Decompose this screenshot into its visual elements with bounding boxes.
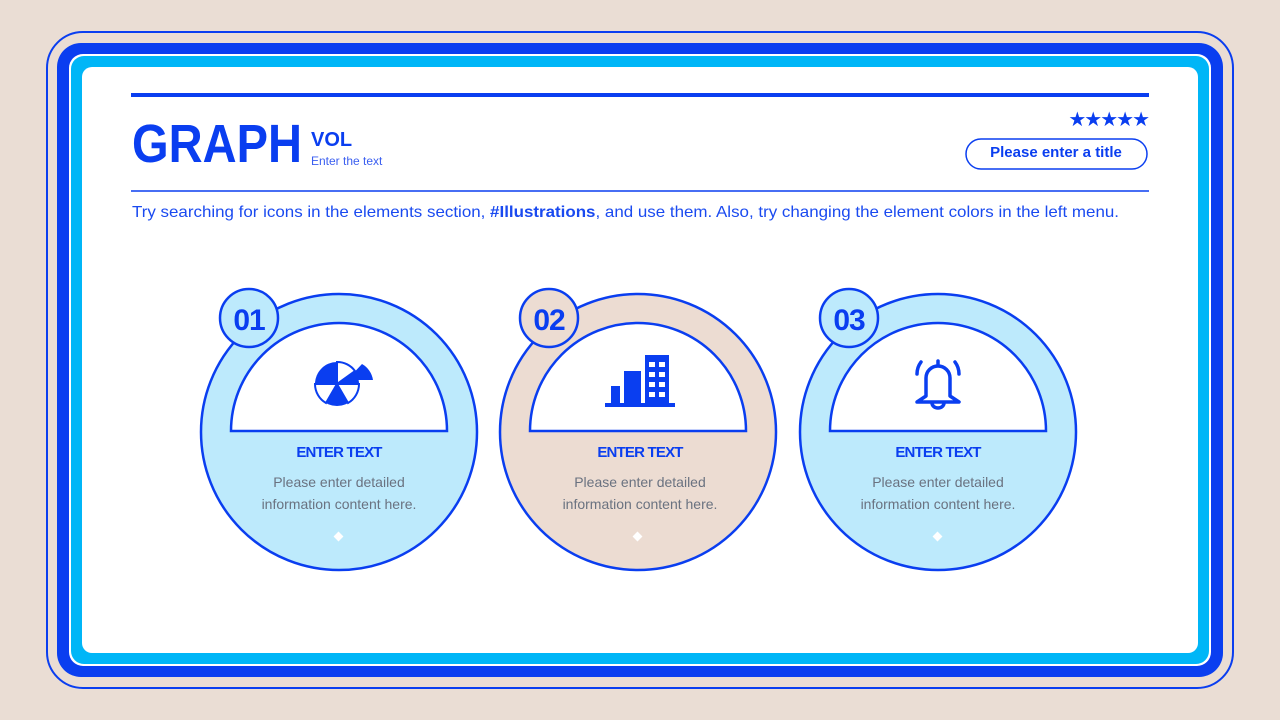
badge 02: 02 bbox=[533, 304, 565, 337]
badge 01: 01 bbox=[233, 304, 265, 337]
title: GRAPH bbox=[132, 114, 302, 174]
icon: pie chart bbox=[315, 362, 373, 406]
badge 02 bbox=[520, 289, 578, 347]
panel 2: Please enter detailed bbox=[574, 474, 706, 490]
title pill bbox=[966, 139, 1147, 169]
badge 03: 03 bbox=[833, 304, 865, 337]
panel 1: information content here. bbox=[262, 496, 416, 512]
subtitle VOL: VOL bbox=[311, 129, 352, 151]
panel 1 bbox=[201, 289, 477, 570]
panel 3: ENTER TEXT bbox=[895, 444, 981, 461]
icon: building bbox=[605, 355, 675, 407]
panel 1: ENTER TEXT bbox=[296, 444, 382, 461]
panel 2 bbox=[500, 289, 776, 570]
panel 2: ENTER TEXT bbox=[597, 444, 683, 461]
title pill: Please enter a title bbox=[990, 144, 1122, 161]
badge 03 bbox=[820, 289, 878, 347]
subtitle VOL bbox=[311, 129, 383, 168]
panel 3: Please enter detailed bbox=[872, 474, 1004, 490]
description: Try searching for icons in the elements section, #Illustrations , and use them. Also, try changing the element colors in the left menu. bbox=[132, 204, 1119, 221]
panel 3 bbox=[800, 289, 1076, 570]
panel 3: information content here. bbox=[861, 496, 1015, 512]
subtitle VOL: Enter the text bbox=[311, 154, 383, 168]
panel 2: information content here. bbox=[563, 496, 717, 512]
stars: ★★★★★ bbox=[1068, 109, 1149, 131]
icon: bell bbox=[917, 361, 959, 408]
badge 01 bbox=[220, 289, 278, 347]
panel 1: Please enter detailed bbox=[273, 474, 405, 490]
